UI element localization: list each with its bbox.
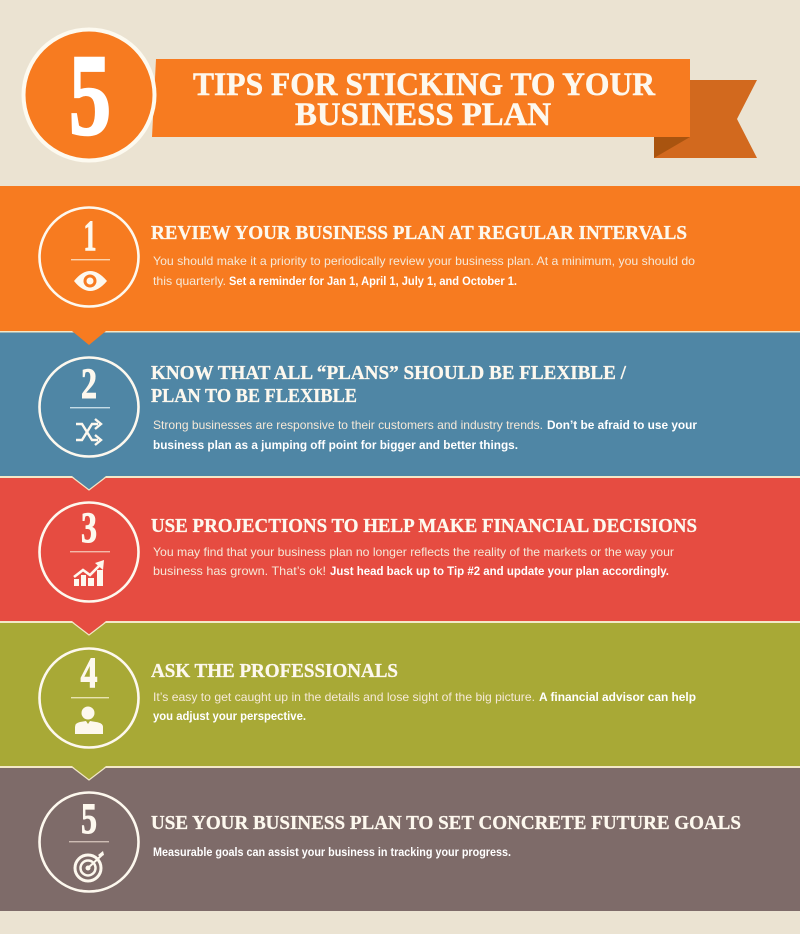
ribbon banner [152, 59, 690, 137]
text block: Just head back up to Tip #2 and update your plan accordingly. [330, 564, 669, 578]
text block [153, 545, 674, 578]
icon: shuffle [76, 419, 101, 445]
number badge 3 [40, 502, 138, 602]
number badge 3: 3 [81, 505, 97, 552]
number badge 2: 2 [81, 361, 97, 408]
heading: REVIEW YOUR BUSINESS PLAN AT REGULAR INTERVALS [151, 222, 687, 244]
icon: eye [74, 271, 107, 291]
text block: this quarterly. [153, 274, 226, 288]
pointer [0, 621, 800, 635]
heading: KNOW THAT ALL “PLANS” SHOULD BE FLEXIBLE / [151, 362, 626, 384]
text block: You should make it a priority to periodically review your business plan. At a minimum, you should do [153, 254, 695, 268]
text block: business plan as a jumping off point for bigger and better things. [153, 438, 518, 452]
number badge 2 [40, 358, 138, 456]
panel: tip 4 [0, 623, 800, 780]
panel: tip 2 [0, 332, 800, 490]
icon: target [75, 851, 104, 881]
pointer [0, 766, 800, 780]
text block [153, 690, 696, 723]
panel: tip 3 [0, 478, 800, 635]
number badge 5 [40, 792, 138, 892]
text block: Set a reminder for Jan 1, April 1, July 1, and October 1. [229, 274, 517, 288]
heading: USE PROJECTIONS TO HELP MAKE FINANCIAL DECISIONS [151, 515, 697, 537]
text block: You may find that your business plan no longer reflects the reality of the markets or the way your [153, 545, 674, 559]
ribbon tail [654, 80, 757, 158]
number badge 4: 4 [80, 650, 98, 697]
text block: you adjust your perspective. [153, 709, 306, 723]
header [22, 28, 757, 162]
text block [153, 418, 697, 452]
text block: A financial advisor can help [539, 690, 696, 704]
text block [153, 254, 695, 288]
badge: number 5: 5 [69, 32, 111, 160]
number badge 1: 1 [84, 213, 96, 260]
badge: number 5 [22, 28, 156, 162]
text block: It’s easy to get caught up in the details and lose sight of the big picture. [153, 690, 535, 704]
number badge 4 [40, 648, 138, 748]
text block: Don’t be afraid to use your [547, 418, 697, 432]
title: BUSINESS PLAN [295, 97, 551, 133]
icon: person [75, 706, 103, 734]
panel: tip 5 [0, 768, 800, 911]
number badge 1 [40, 208, 138, 306]
heading: ASK THE PROFESSIONALS [151, 660, 398, 682]
title [193, 67, 656, 133]
text block: Strong businesses are responsive to their customers and industry trends. [153, 418, 543, 432]
number badge 5: 5 [81, 796, 97, 843]
heading [151, 362, 626, 407]
text block: Measurable goals can assist your business in tracking your progress. [153, 845, 511, 859]
panel: tip 1 [0, 186, 800, 345]
heading: PLAN TO BE FLEXIBLE [151, 385, 357, 407]
icon: growth chart [74, 560, 104, 586]
title: TIPS FOR STICKING TO YOUR [193, 67, 656, 103]
pointer [0, 331, 800, 345]
pointer [0, 476, 800, 490]
text block: business has grown. That’s ok! [153, 564, 326, 578]
heading: USE YOUR BUSINESS PLAN TO SET CONCRETE FUTURE GOALS [151, 812, 741, 834]
